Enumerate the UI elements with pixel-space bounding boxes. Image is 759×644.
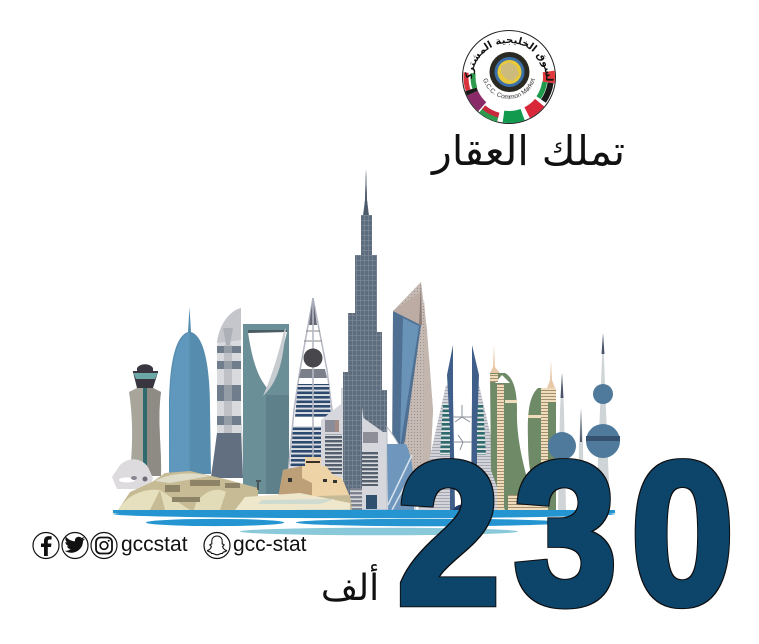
handle: gcc-stat: gcc-stat — [233, 533, 307, 556]
unit word: ألف — [321, 564, 379, 609]
building: small tower beside Faisaliah — [321, 388, 343, 478]
building: Kuwait Towers — [548, 333, 620, 510]
handle: gccstat: gccstat — [121, 533, 188, 556]
building: Burj Khalifa — [343, 169, 387, 512]
icon: twitter — [62, 532, 88, 558]
building: National Museum of Qatar — [118, 471, 352, 510]
logo english text: G.C.C. Common Market — [484, 78, 535, 100]
social icons — [33, 532, 307, 558]
building: Hamra tower — [392, 282, 433, 490]
building: Kingdom Centre — [243, 324, 289, 494]
building: airport control tower — [129, 364, 161, 476]
skyline illustration — [112, 169, 620, 512]
icon: instagram — [91, 532, 117, 558]
building: Museum of Islamic Art — [277, 457, 350, 505]
building: green twin towers — [490, 345, 556, 510]
logo: GCC statistical emblem — [462, 30, 556, 124]
building: white dome — [112, 459, 153, 489]
building: Al Faisaliah tower — [288, 298, 336, 475]
icon: snapchat — [204, 532, 230, 558]
logo seal — [490, 52, 530, 92]
icon: facebook — [33, 532, 59, 558]
building: Dubai tower and curved tower — [350, 407, 415, 510]
building: striped curved tower — [211, 308, 243, 478]
water reflections — [113, 510, 615, 535]
building: twin sail Bahrain WTC — [418, 345, 508, 510]
building: blue bullet tower — [169, 307, 211, 474]
logo flags ring — [465, 33, 553, 121]
title: تملك العقار — [430, 127, 625, 175]
large number: 230 — [397, 422, 748, 644]
